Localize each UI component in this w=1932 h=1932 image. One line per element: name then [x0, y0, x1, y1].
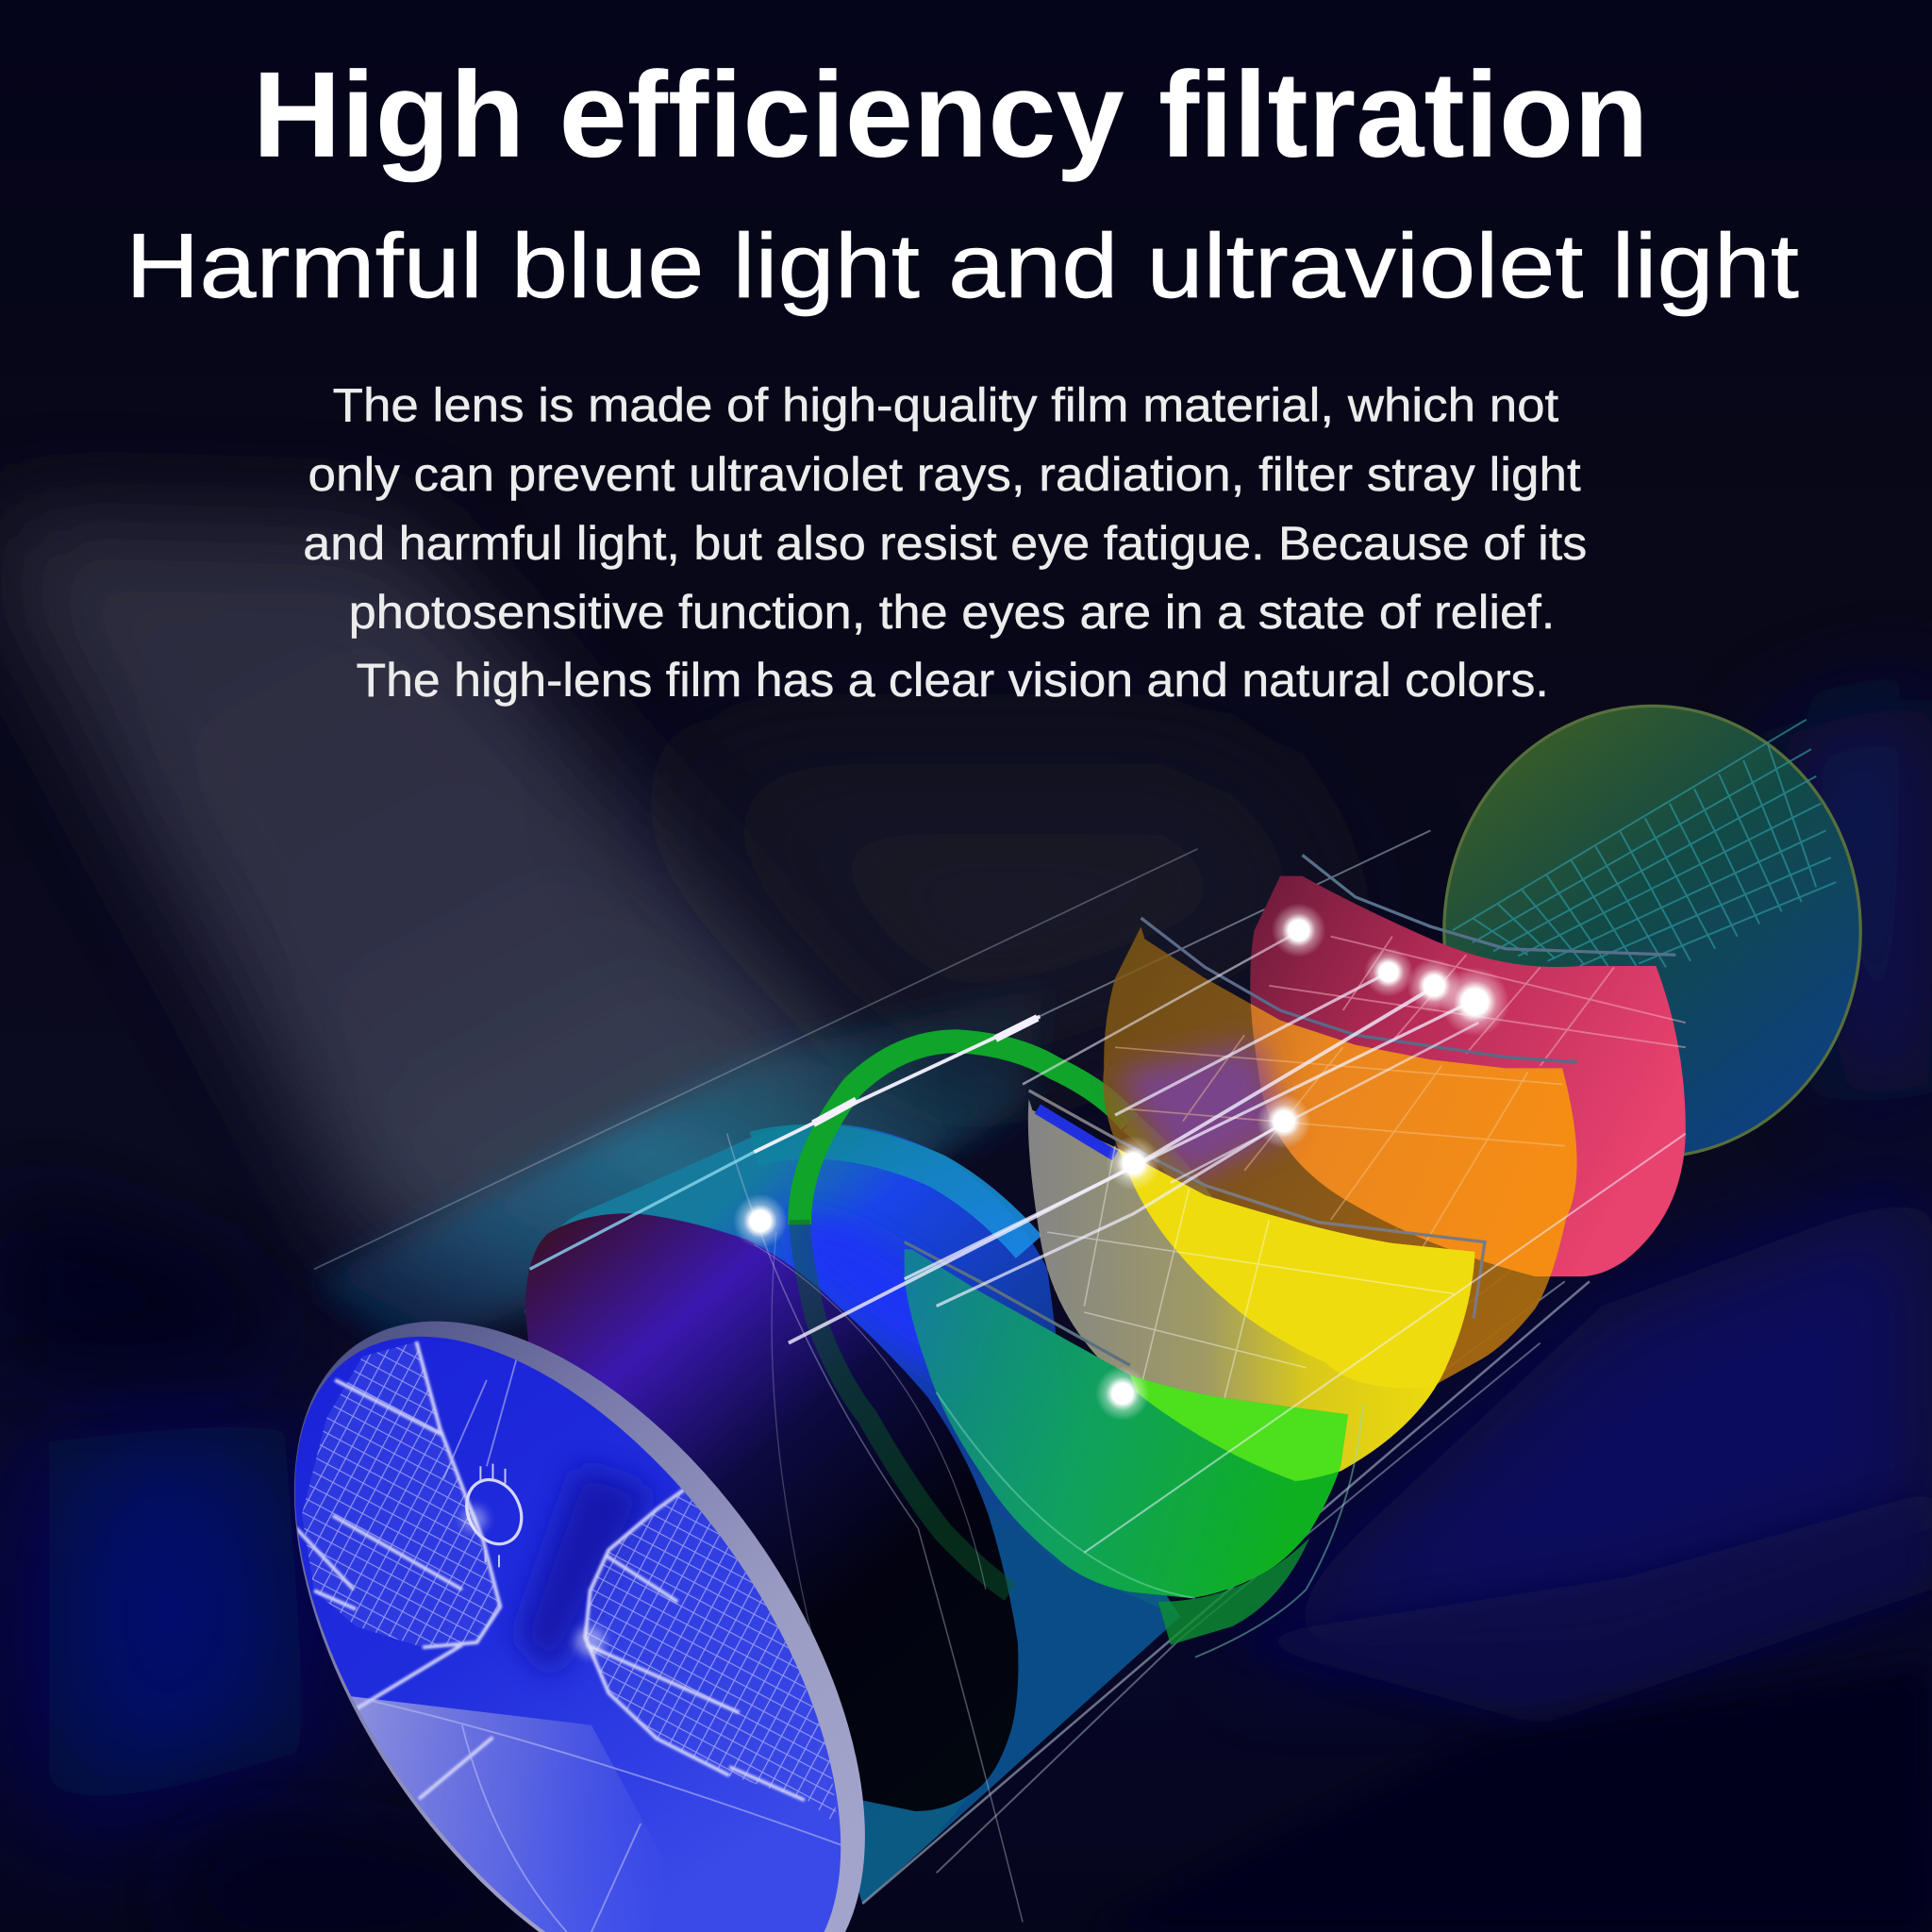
rear teal circular lens — [1444, 706, 1860, 1157]
body text: and harmful light, but also resist eye fatigue. Because of its — [303, 517, 1587, 570]
body text — [303, 379, 1587, 707]
lower-left frosted sector — [351, 1696, 641, 1932]
iris ring — [457, 1471, 532, 1553]
rear lens mesh — [1453, 720, 1836, 967]
orange shield base — [1103, 926, 1577, 1388]
green ring — [800, 1041, 1227, 1592]
yellow over orange overlap — [1118, 1149, 1475, 1387]
yellow filter layer — [1028, 1091, 1485, 1481]
red filter layer — [1250, 855, 1686, 1276]
body text: only can prevent ultraviolet rays, radiation, filter stray light — [308, 448, 1581, 501]
green over yellow overlap — [1130, 1375, 1348, 1481]
lens artwork — [295, 1341, 850, 1932]
body text: photosensitive function, the eyes are in a state of relief. — [349, 586, 1555, 639]
light rays — [530, 931, 1686, 1553]
red shield — [1250, 876, 1686, 1276]
lens face — [295, 1337, 841, 1932]
orange over red overlap — [1251, 1004, 1577, 1276]
lobe outlines — [295, 1341, 805, 1800]
title: High efficiency filtration — [253, 47, 1649, 183]
lens rim — [294, 1322, 865, 1932]
left grid lobe — [302, 1341, 500, 1647]
lens tube body — [525, 1124, 1180, 1904]
green filter layer — [905, 1242, 1363, 1657]
yellow shield — [1028, 1099, 1474, 1481]
tube inner shine — [789, 1214, 974, 1392]
teal haze around the tube — [314, 986, 1047, 1356]
tube shell — [525, 1124, 1180, 1904]
dark centre shade — [518, 1466, 653, 1675]
body text: The lens is made of high-quality film material, which not — [333, 379, 1558, 432]
background: light beam and wisps — [0, 518, 1932, 1932]
thin frame lines — [314, 830, 1715, 1923]
light points — [733, 903, 1509, 1421]
green shield — [905, 1249, 1348, 1598]
subtitle: Harmful blue light and ultraviolet light — [125, 216, 1799, 317]
tube band — [754, 1141, 1029, 1247]
orange filter layer — [1103, 918, 1577, 1388]
purple ray area — [1115, 1041, 1288, 1183]
tube opening — [525, 1213, 1018, 1811]
fine lens lines — [370, 1356, 850, 1932]
lower green ribbon — [1158, 1538, 1309, 1645]
blue stripe in the tip — [1038, 1109, 1115, 1156]
right grid lobe — [585, 1484, 838, 1826]
node glows — [462, 1507, 487, 1532]
body text: The high-lens film has a clear vision and natural colors. — [356, 654, 1549, 707]
lower teal flare — [937, 1505, 1180, 1836]
blue lens disc — [294, 1322, 865, 1932]
